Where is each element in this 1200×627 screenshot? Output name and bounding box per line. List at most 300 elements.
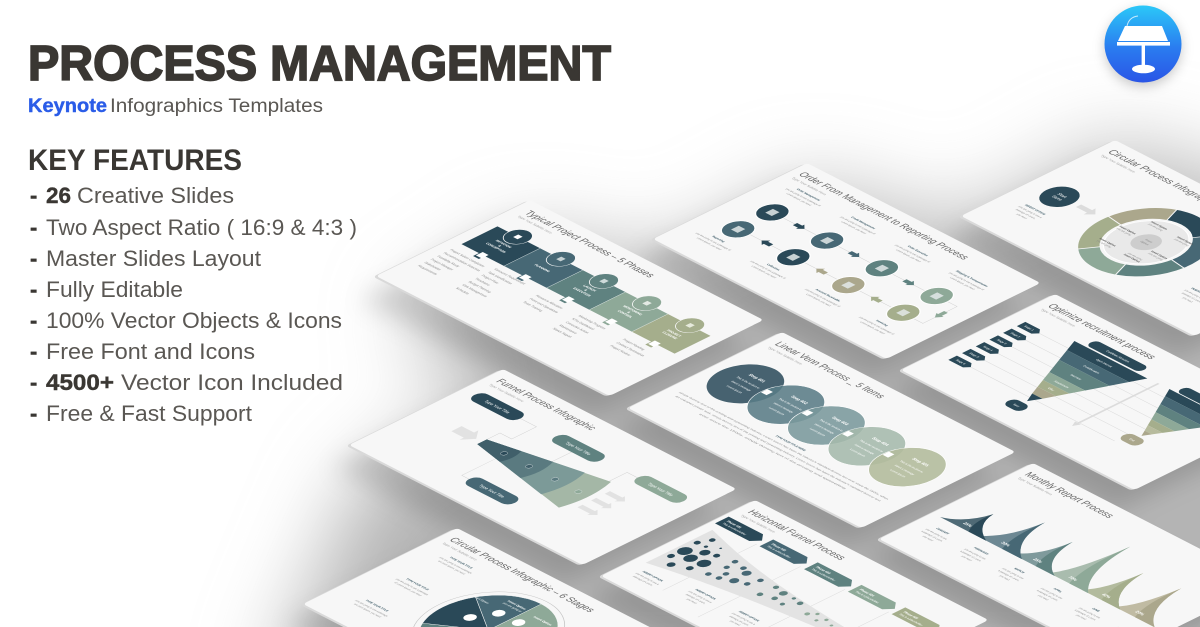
process steps: &	[626, 311, 632, 314]
start node: Start	[1056, 192, 1069, 199]
option text: you are going to use a	[687, 590, 714, 604]
slide: funnel process	[346, 369, 737, 566]
key features list: Vector Icon Included	[121, 370, 343, 395]
phase checklists: Front-end Operations	[528, 298, 560, 314]
sector labels	[472, 589, 556, 627]
key features list: Free & Fast Support	[46, 401, 252, 426]
step labels: Lorem Ipsum	[808, 427, 827, 437]
stage tags: Stage 1	[1023, 325, 1035, 331]
node labels: you are going to use a passage of	[695, 232, 733, 251]
stage tags: Stage 3	[995, 338, 1008, 345]
heading: Optimize recruitment process	[1044, 303, 1159, 361]
option text: you are going to use a	[635, 572, 661, 586]
subtitle: Type Your Subtitle Here	[766, 346, 804, 365]
option text: INSERT OPTION	[641, 570, 664, 582]
step labels: Step 405	[911, 457, 931, 467]
step labels: insert a message	[813, 423, 836, 435]
phase tags: This is a placeholder	[766, 545, 792, 559]
step labels: This is the section to	[898, 460, 925, 473]
heading: Circular Process Infographic – 6 Stages	[446, 536, 597, 614]
node labels: Lorem Ipsum, you need	[805, 293, 833, 307]
phase checklists	[413, 247, 656, 371]
dots 2	[704, 559, 771, 593]
recruitment funnel: Candidate Attraction	[1105, 350, 1131, 363]
month labels: FEBRUARY	[973, 547, 990, 555]
month labels: you are going to use	[963, 548, 988, 560]
flow connectors	[739, 212, 957, 323]
step labels: This is the section to	[818, 419, 845, 432]
slide edge	[300, 529, 688, 627]
recruitment funnel: Offer	[1046, 387, 1056, 392]
phase checklists: Corrective Action	[564, 321, 590, 334]
slide surface	[628, 332, 1016, 528]
heading: Monthly Report Process	[1021, 471, 1116, 520]
right description: you need	[1181, 296, 1195, 303]
ring hub: Insert Option	[1118, 225, 1137, 235]
month labels: JUNE	[1091, 607, 1101, 612]
dots	[656, 535, 739, 576]
start pill	[1002, 398, 1031, 413]
pill: title 1: Type Your Title	[483, 399, 512, 414]
key features list: -	[30, 246, 37, 271]
slide surface	[349, 369, 737, 565]
left labels: TYPE YOUR TITLE	[364, 599, 390, 612]
venn description: an unknown printer took. simply dummy text of the printing and typesetting industry. Lorem Ipsum has been the industry's standard dummy text	[674, 395, 883, 502]
step labels	[721, 371, 935, 480]
dots 3	[755, 585, 808, 611]
slide edge	[876, 464, 1200, 627]
month labels: you need	[960, 555, 974, 562]
option text: INSERT OPTION	[694, 588, 717, 600]
phase tags: Phase 401	[725, 520, 743, 529]
left labels: you are going to use a passage	[354, 599, 390, 617]
node labels: Order Execution	[906, 245, 930, 257]
slide drop shadows	[287, 162, 1200, 627]
option text: you need	[729, 620, 742, 626]
slide: horizontal funnel	[598, 500, 989, 627]
node labels: Shipping & Transportation	[954, 270, 989, 288]
slide surface	[879, 463, 1200, 627]
ring hub: Option	[1139, 240, 1150, 246]
month labels: you are going to use	[1001, 567, 1026, 580]
process steps: CLOSURE	[661, 331, 679, 340]
flow nodes	[714, 200, 961, 325]
pill: title 2	[548, 433, 609, 464]
ring hub: Insert	[1144, 238, 1154, 244]
subtitle: Type Your Subtitle Here	[441, 542, 478, 561]
subtitle: Type Your Subtitle Here	[516, 215, 554, 234]
phase checklists: Feasibility Study	[436, 255, 461, 268]
subtitle: Type Your Subtitle Here	[1099, 154, 1137, 173]
slide edge	[958, 141, 1200, 337]
venn description: TYPE YOUR TITLE HERE	[774, 435, 807, 452]
phase tags: This is a placeholder	[854, 590, 880, 604]
end pill: End	[1128, 438, 1136, 442]
process steps: MONITORING	[622, 305, 644, 316]
node labels: you are going to use a passage of	[784, 187, 822, 207]
option text: passage of Lorem,	[685, 593, 708, 605]
slide surface	[303, 528, 691, 627]
stage tags	[948, 322, 1044, 369]
phase tags: Phase 402	[770, 543, 787, 552]
phase checklists: Recommendation Selection	[442, 252, 482, 272]
key features list: 100% Vector Objects & Icons	[46, 308, 342, 333]
month labels: JANUARY	[935, 527, 951, 535]
node icons	[731, 208, 944, 317]
option text: you need	[685, 598, 699, 605]
phase checklists: Budget Planning	[467, 281, 492, 293]
start description: you are going to use a	[1017, 205, 1044, 219]
subtitle: Type Your Subtitle Here	[790, 177, 828, 196]
month labels: a passage of Lorem,	[1073, 609, 1098, 621]
step labels: Step 402	[790, 395, 810, 405]
month labels: you are going to use	[925, 528, 949, 540]
recruitment funnel: Consideration	[1082, 365, 1101, 374]
slide: typical project process	[373, 200, 764, 397]
node labels: you are going to use a passage of	[948, 271, 986, 291]
venn circles	[691, 356, 962, 495]
left labels: of Lorem Ipsum, you need	[393, 581, 423, 597]
sail chart: 20%	[1134, 610, 1146, 616]
key features list: -	[30, 183, 37, 208]
start node: Store	[1050, 195, 1064, 202]
icon: keynote app	[1104, 6, 1182, 86]
process steps: INITIATION	[494, 239, 513, 249]
dots 4	[802, 610, 839, 627]
sail chart: 40%	[1100, 593, 1113, 599]
subtitle	[28, 96, 323, 117]
phase tags: Phase 403	[814, 566, 832, 575]
month labels	[916, 525, 1146, 627]
process steps: LAUNCH	[582, 284, 598, 292]
process steps: EXECUTION	[572, 287, 592, 297]
month labels: you need	[1037, 594, 1050, 601]
month labels: you are going to use	[1078, 607, 1102, 619]
node labels: you are going to use a passage of	[894, 244, 932, 263]
funnel	[456, 429, 615, 509]
heading: Typical Project Process – 5 Phases	[521, 209, 657, 279]
process steps: &	[583, 289, 589, 292]
key features list: Two Aspect Ratio ( 16:9 & 4:3 )	[46, 215, 357, 240]
outer ring arrow	[380, 576, 596, 627]
funnel band	[646, 530, 923, 627]
recruitment funnel: Open Interest	[1095, 358, 1114, 368]
phase tags: This is a placeholder	[810, 568, 837, 581]
month labels: you need	[922, 535, 935, 542]
slide: order management	[650, 163, 1041, 360]
sail chart: 70%	[1067, 576, 1079, 582]
left labels	[348, 554, 481, 620]
flow arrows	[757, 222, 964, 327]
key features list: -	[30, 339, 37, 364]
month labels: a passage of Lorem,	[920, 530, 945, 542]
sector icons	[461, 603, 528, 627]
step labels: This is the section to	[777, 398, 804, 411]
node labels: Reporting	[711, 235, 726, 243]
pill: title 2: Type Your Title	[564, 441, 593, 456]
phase checklists: Contract Termination	[615, 341, 646, 357]
month labels: a passage of Lorem,	[1035, 589, 1060, 602]
phase checklists: Project Manager	[429, 258, 455, 271]
subtitle: Type Your Subtitle Here	[1039, 308, 1077, 327]
overlap markers	[761, 389, 894, 458]
start description	[1009, 203, 1049, 223]
main title: PROCESS MANAGEMENT	[28, 37, 611, 91]
option text	[630, 565, 762, 627]
phase checklists: Resource Requirement	[493, 268, 527, 285]
heading: Linear Venn Process _ 5 Items	[771, 341, 888, 400]
phase checklists: Timeframe	[474, 277, 491, 286]
month labels: a passage of Lorem,	[959, 550, 983, 562]
pill: title 3	[462, 476, 522, 506]
slide edge	[625, 333, 1013, 529]
month labels: you are going to use	[1040, 587, 1064, 600]
sail chart: 30%	[1000, 541, 1012, 547]
node labels: Collection	[765, 263, 781, 271]
month labels: MARCH	[1013, 567, 1026, 574]
subtitle: Keynote	[28, 96, 107, 117]
process steps: &	[497, 244, 503, 248]
ring hub: you are going	[1147, 223, 1165, 232]
ring hub: you are going	[1147, 252, 1165, 261]
sail chart	[940, 484, 1200, 627]
end pill	[1117, 432, 1147, 447]
phase tags	[715, 517, 945, 627]
recruitment funnel	[991, 335, 1159, 420]
venn description: simply dummy text of the printing and typesetting industry. Lorem Ipsum has been the industry's standard dummy text ever since the 1500s, when	[678, 391, 891, 501]
phase tags: Phase 404	[858, 588, 876, 597]
month labels: you need	[998, 574, 1012, 581]
right description	[1175, 286, 1200, 307]
ring hub: Insert Option	[1176, 236, 1195, 246]
node labels: you are going to use a passage of	[749, 260, 787, 279]
step labels: This is the section to	[858, 439, 885, 453]
slide edge	[650, 164, 1038, 360]
step labels: Step 404	[871, 436, 891, 447]
step labels: Step 401	[747, 373, 767, 383]
heading: Horizontal Funnel Process	[744, 509, 848, 562]
node labels: you are going to use a passage of	[804, 288, 842, 308]
key features list: -	[30, 370, 37, 395]
outcome funnel	[1109, 383, 1200, 453]
process steps: CONTROL	[616, 310, 634, 319]
month labels: a passage of Lorem,	[997, 569, 1021, 582]
process steps	[456, 221, 722, 357]
sector labels: you are going to	[502, 602, 523, 613]
phase checklists: KPIs Dashboard	[571, 318, 596, 331]
key features list: -	[30, 215, 37, 240]
process steps: CONCEPTION	[485, 242, 507, 254]
node labels: Lorem Ipsum, you need	[785, 192, 813, 207]
sector labels: Insert Option	[472, 595, 491, 605]
ring hub: Insert Option	[1122, 253, 1142, 263]
subtitle: Infographics Templates	[110, 96, 323, 117]
left labels: you are going to use a passage	[395, 578, 430, 596]
node labels: Account Receivable	[814, 288, 842, 302]
stage lines	[971, 333, 1190, 445]
stage tags: Stage 2	[1009, 332, 1022, 338]
phase checklists: Status Report	[551, 327, 573, 338]
step labels: Step 403	[830, 416, 851, 426]
phase checklists: Risk Management	[461, 284, 488, 298]
slide surface	[961, 140, 1200, 336]
ring hub: Insert Option	[1098, 237, 1117, 247]
node labels	[690, 185, 991, 337]
option text: passage of Lorem,	[728, 615, 751, 627]
step labels: Lorem Ipsum	[725, 385, 744, 394]
node labels: Lorem Ipsum, you need	[750, 265, 778, 279]
slide: circular six stages	[300, 528, 691, 627]
key features list: 26	[46, 183, 71, 208]
slide surface	[601, 500, 989, 627]
step labels: Lorem Ipsum	[889, 469, 907, 478]
phase checklists: Monitoring Progress	[577, 315, 607, 330]
ring hub: you are going	[1127, 252, 1145, 261]
process steps: PROJECT	[665, 329, 683, 338]
phase checklists: Maintenance	[558, 324, 578, 335]
phase checklists: Task Identification	[486, 271, 513, 285]
phase tags: This is a placeholder	[898, 613, 924, 626]
key features list	[30, 183, 357, 426]
node labels: Lorem Ipsum, you need	[840, 220, 868, 235]
phase checklists: Project Select Completion	[449, 249, 486, 268]
key features list: -	[30, 308, 37, 333]
start description: you need	[1015, 213, 1029, 220]
stage tags: Stage 4	[982, 345, 994, 352]
key features list: -	[30, 401, 37, 426]
output arrows	[575, 490, 630, 517]
key features list: 4500+	[46, 370, 114, 395]
option text: you are going to use a	[731, 612, 757, 626]
start description: INSERT OPTION	[1024, 204, 1047, 215]
node labels: Order Management	[795, 188, 822, 201]
slide edge	[346, 370, 734, 566]
step labels: insert a message	[772, 402, 795, 414]
step labels: This is the section to	[735, 376, 762, 389]
step labels: insert a message	[730, 380, 753, 392]
phase checklists: Project Handing	[621, 338, 646, 351]
circular ring	[1052, 195, 1200, 289]
node labels: you are going to use a passage of	[858, 316, 896, 335]
left labels: you are going to use a passage	[438, 556, 474, 575]
subtitle: Type Your Subtitle Here	[488, 383, 525, 403]
key features list: Creative Slides	[77, 183, 234, 208]
slide: monthly report	[876, 463, 1200, 627]
node labels: Lorem Ipsum, you need	[895, 249, 923, 263]
left labels: of Lorem Ipsum, you need	[353, 603, 383, 618]
sector labels: Insert Option	[506, 600, 527, 610]
ring hub: Insert Option	[1150, 250, 1169, 260]
option text: INSERT OPTION	[737, 610, 761, 622]
key features list: Free Font and Icons	[46, 339, 255, 364]
phase checklists: Project Review	[609, 345, 632, 357]
ring hub: you are going	[1095, 239, 1113, 248]
ring hub: you are going	[1116, 227, 1133, 236]
phase checklists: Resource Allocation	[534, 294, 564, 310]
slide: linear venn	[625, 332, 1016, 529]
ring hub: you are going	[1173, 238, 1191, 247]
stage tags: Stage 6	[954, 359, 967, 365]
phase checklists: Schedule	[454, 287, 470, 295]
connectors	[433, 418, 637, 521]
pie sectors	[390, 581, 586, 627]
option text: passage of Lorem,	[632, 575, 655, 587]
node labels: you are going to use a passage of	[839, 216, 877, 235]
node labels: Invoicing	[875, 319, 890, 327]
month labels: APRIL	[1052, 587, 1064, 593]
recruitment funnel: Assessment	[1053, 380, 1070, 389]
arrow	[1073, 203, 1101, 217]
key features list: -	[30, 277, 37, 302]
step labels: insert a message	[893, 464, 916, 476]
key features list: Fully Editable	[46, 277, 183, 302]
phase checklists: Project Flow	[480, 274, 500, 285]
sail chart: 25%	[1032, 558, 1044, 564]
sail chart: 25%	[962, 522, 974, 528]
node labels: Lorem Ipsum, you need	[859, 321, 887, 335]
slide edge	[598, 501, 986, 627]
phase checklists: Stakeholder	[423, 261, 443, 271]
start node	[1031, 182, 1088, 211]
slide surface	[901, 294, 1200, 490]
subtitle: Type Your Subtitle Here	[1016, 477, 1054, 496]
direction arrow	[1069, 382, 1161, 427]
process steps: PLANNING	[533, 264, 552, 273]
phase checklists: Requirements	[416, 264, 439, 276]
step labels: Lorem Ipsum	[768, 406, 786, 416]
pill: title 4	[630, 474, 691, 505]
background soft shadow	[270, 145, 1200, 627]
ring hub	[1085, 211, 1200, 273]
step labels: Lorem Ipsum	[849, 448, 867, 458]
heading: Order From Management to Reporting Process	[795, 171, 971, 261]
left labels: TYPE YOUR TITLE	[448, 556, 474, 569]
venn description	[666, 388, 897, 506]
left labels: of Lorem Ipsum, you need	[437, 560, 467, 575]
venn description: ever since the 1500s. simply dummy text of the printing and typesetting	[698, 413, 848, 490]
heading: Funnel Process Infographic	[493, 378, 599, 432]
slide surface	[653, 163, 1041, 359]
stage tags: Stage 5	[968, 352, 981, 358]
start pill: Start	[1012, 403, 1021, 408]
column dividers	[654, 544, 889, 627]
input arrow	[447, 424, 486, 443]
phase tags: This is a placeholder	[721, 522, 748, 536]
node labels: Lorem Ipsum, you need	[695, 237, 723, 251]
node labels: Lorem Ipsum, you need	[949, 276, 977, 291]
node labels: Credit Management	[850, 216, 877, 230]
recruitment funnel: Interview	[1069, 374, 1083, 381]
slide thumbnails	[300, 140, 1200, 627]
step labels: insert a message	[853, 444, 876, 455]
month labels: you need	[1075, 614, 1088, 621]
slide: circular process	[958, 140, 1200, 337]
slide edge	[373, 201, 761, 397]
pill: title 1	[467, 391, 528, 422]
subtitle: Type Your Subtitle Here	[739, 514, 777, 533]
slide edge	[898, 295, 1200, 491]
key features heading: KEY FEATURES	[28, 144, 242, 177]
slide surface	[376, 200, 764, 396]
pill: title 4: Type Your Title	[646, 482, 675, 497]
start description: passage of Lorem,	[1015, 208, 1038, 220]
sector labels: Insert Option	[532, 616, 553, 626]
phase tags: Phase 405	[902, 611, 919, 620]
left labels: TYPE YOUR TITLE	[405, 578, 430, 591]
phase checklists: Team Training	[522, 301, 544, 312]
pill: title 3: Type Your Title	[477, 484, 507, 499]
slide: optimize recruitment	[898, 294, 1200, 491]
